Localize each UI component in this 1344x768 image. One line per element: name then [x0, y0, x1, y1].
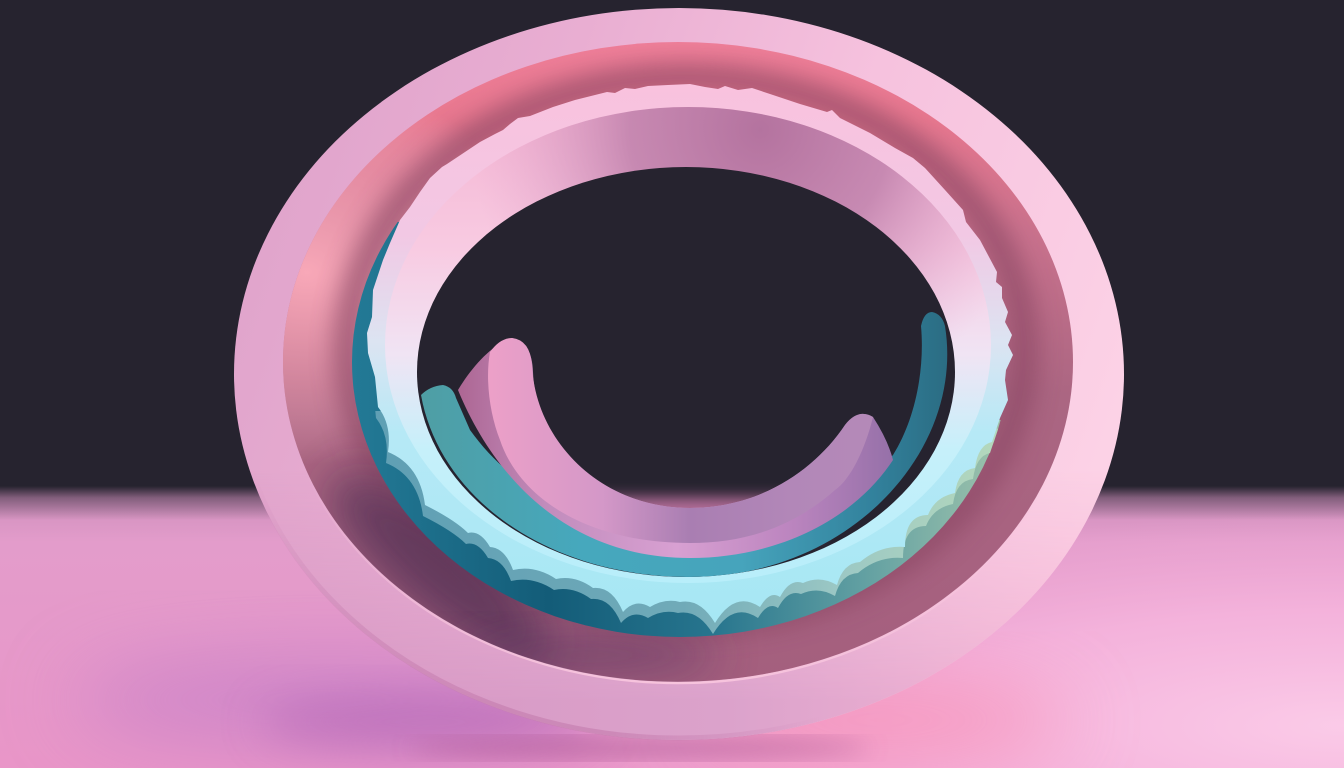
- central opening: [417, 167, 955, 577]
- crescent inner face: [488, 338, 873, 543]
- wall shadow behind the scalloped band: [348, 78, 1024, 622]
- pink inner crescent: [458, 338, 893, 558]
- background: dark wall: [0, 0, 1344, 500]
- teal inner crescent: [421, 312, 947, 577]
- recessed inner wall: [282, 41, 1074, 694]
- ring shadow on floor: [70, 658, 1070, 758]
- inner pink ring: [385, 107, 991, 583]
- lower left deep shadow: [312, 452, 568, 666]
- floor: pink surface: [0, 486, 1344, 768]
- outer ring: [234, 8, 1124, 740]
- rim: scallop shading: [375, 411, 998, 634]
- rim: pale to cyan scalloped band: [367, 84, 1013, 623]
- rim: dark teal lower edge: [352, 222, 1001, 637]
- crescent outer face: [458, 338, 893, 558]
